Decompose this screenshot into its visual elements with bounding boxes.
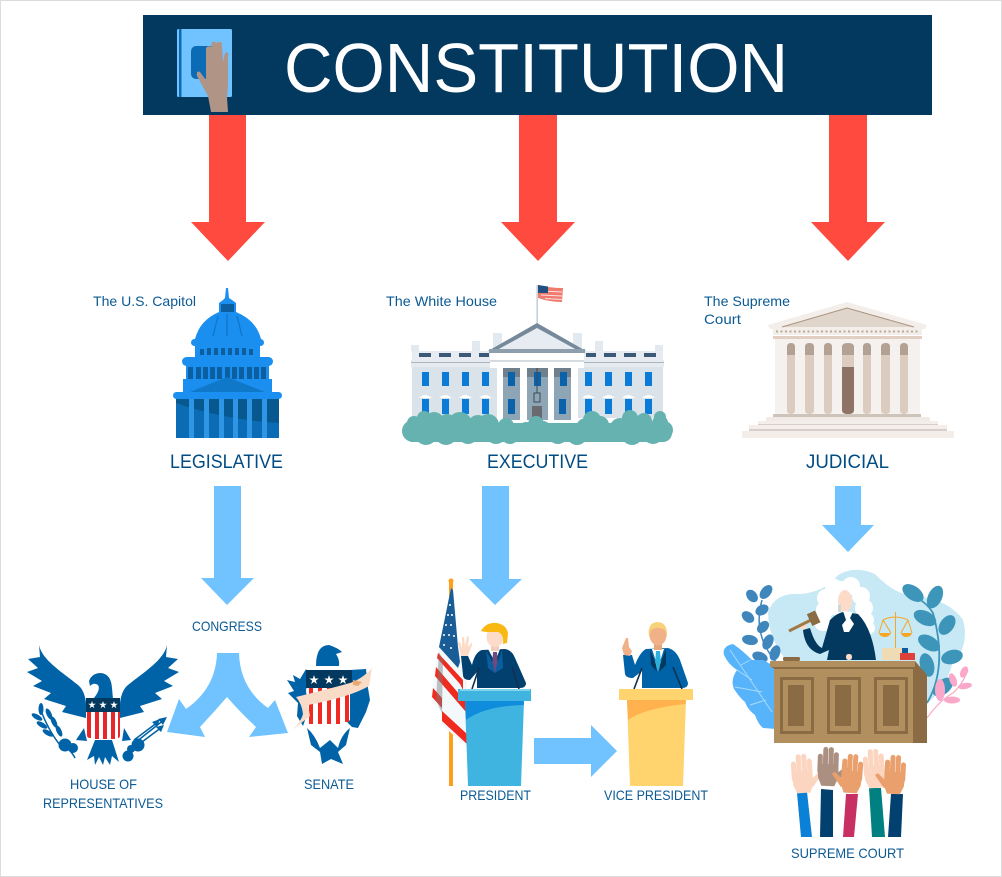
icon: president at podium	[458, 623, 531, 786]
flag on roof	[536, 285, 563, 325]
gavel	[783, 610, 820, 661]
hand and sleeve: teal	[862, 748, 895, 837]
hand and sleeve: blue	[790, 753, 823, 837]
label: president: PRESIDENT	[460, 787, 531, 803]
heading: legislative: LEGISLATIVE	[170, 451, 283, 473]
arrow: legislative to congress	[201, 486, 254, 605]
label: senate: SENATE	[304, 776, 354, 792]
books	[882, 648, 915, 660]
icon: Supreme Court building	[742, 302, 954, 438]
label: congress: CONGRESS	[192, 618, 262, 634]
arrow: president to vice president	[534, 725, 617, 777]
icon: vice president at podium	[619, 622, 693, 786]
arrow: constitution to judicial	[811, 115, 885, 261]
icon: eagle seal	[27, 645, 179, 765]
label: house of representatives: HOUSE OF	[70, 776, 137, 792]
bench	[770, 661, 927, 743]
bushes	[402, 410, 673, 445]
arrow: constitution to executive	[501, 115, 575, 261]
heading: judicial: JUDICIAL	[806, 451, 889, 473]
label: vice president: VICE PRESIDENT	[604, 787, 708, 803]
arrow: congress split	[167, 653, 288, 737]
hand and sleeve: navy	[817, 747, 849, 837]
judge figure	[783, 577, 915, 661]
left branch	[739, 583, 782, 664]
icon: American flag	[431, 578, 467, 786]
large blue leaf	[724, 644, 776, 729]
arrow: judicial to supreme court	[822, 486, 874, 552]
title: CONSTITUTION	[284, 29, 788, 107]
arrow: constitution to legislative	[191, 115, 265, 261]
label: the White House: The White House	[386, 293, 497, 309]
label: the Supreme Court: Court	[704, 311, 741, 327]
scales	[879, 612, 912, 650]
label: supreme court: SUPREME COURT	[791, 845, 904, 861]
arrow: executive to president	[469, 486, 522, 605]
label: the Supreme Court: The Supreme	[704, 293, 790, 309]
pink sprig	[927, 665, 972, 718]
label: the U.S. Capitol: The U.S. Capitol	[93, 293, 196, 309]
heading: executive: EXECUTIVE	[487, 451, 588, 473]
icon: White House	[402, 285, 673, 445]
icon: hand on book	[177, 29, 232, 112]
illustration: judge at bench	[724, 570, 972, 743]
backdrop blob	[768, 570, 965, 705]
hand and sleeve: dark blue	[874, 754, 906, 837]
title banner	[143, 15, 932, 115]
shield	[86, 698, 120, 739]
stripes	[307, 688, 350, 724]
hand and sleeve: crimson	[831, 753, 864, 837]
icon: raised hands	[790, 747, 906, 837]
icon: senate shield	[287, 645, 372, 764]
label: house of representatives: REPRESENTATIVES	[43, 795, 163, 811]
icon: capitol building	[173, 288, 282, 438]
right branch	[899, 580, 964, 703]
